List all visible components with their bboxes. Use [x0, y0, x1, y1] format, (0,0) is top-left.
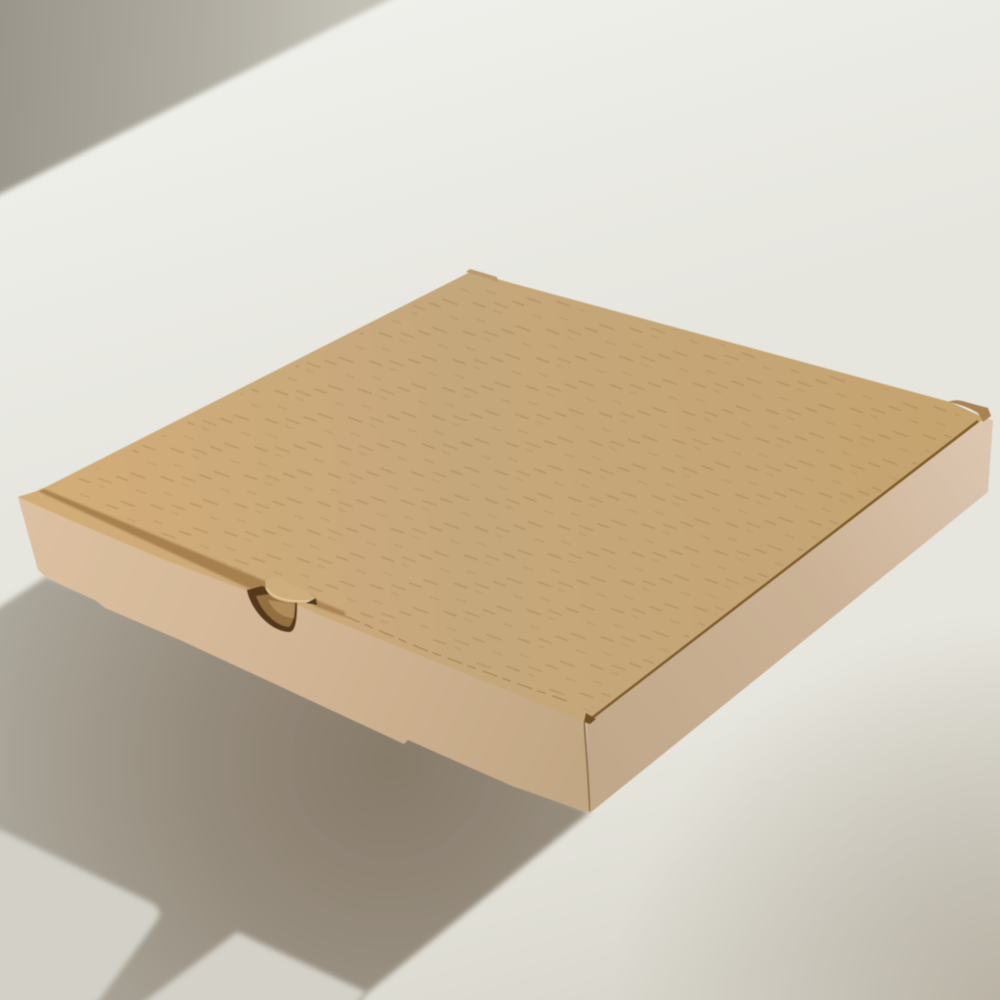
corner tab: right	[948, 400, 991, 422]
groove continuing right of tab	[314, 600, 345, 617]
tab	[265, 577, 316, 603]
box lid and front lip	[18, 272, 985, 722]
box right side wall	[586, 418, 993, 813]
pizza box	[18, 269, 993, 813]
shadow: cast by box on floor	[0, 576, 590, 1000]
locking slot with tab	[247, 577, 317, 632]
dark notch at top of corner crease	[584, 713, 596, 724]
corrugation ribs on lid	[60, 276, 975, 712]
shadow: top-left corner	[0, 0, 408, 199]
corner tab: back	[466, 269, 498, 282]
vertical edge crease at front corner	[584, 722, 590, 811]
slot hole	[247, 586, 297, 632]
groove between lid and front lip	[38, 489, 270, 596]
dark gap beside tab	[306, 598, 317, 605]
box front wall	[18, 492, 590, 813]
slot inner corrugation	[256, 594, 295, 627]
torn dashed edge on front lip	[345, 616, 567, 701]
lid right edge dark crease	[592, 421, 978, 718]
tab edge	[266, 588, 316, 601]
slot lighter fold	[268, 600, 295, 618]
light patch: lower-middle	[120, 932, 366, 1000]
light patch: lower-left	[0, 820, 160, 1000]
